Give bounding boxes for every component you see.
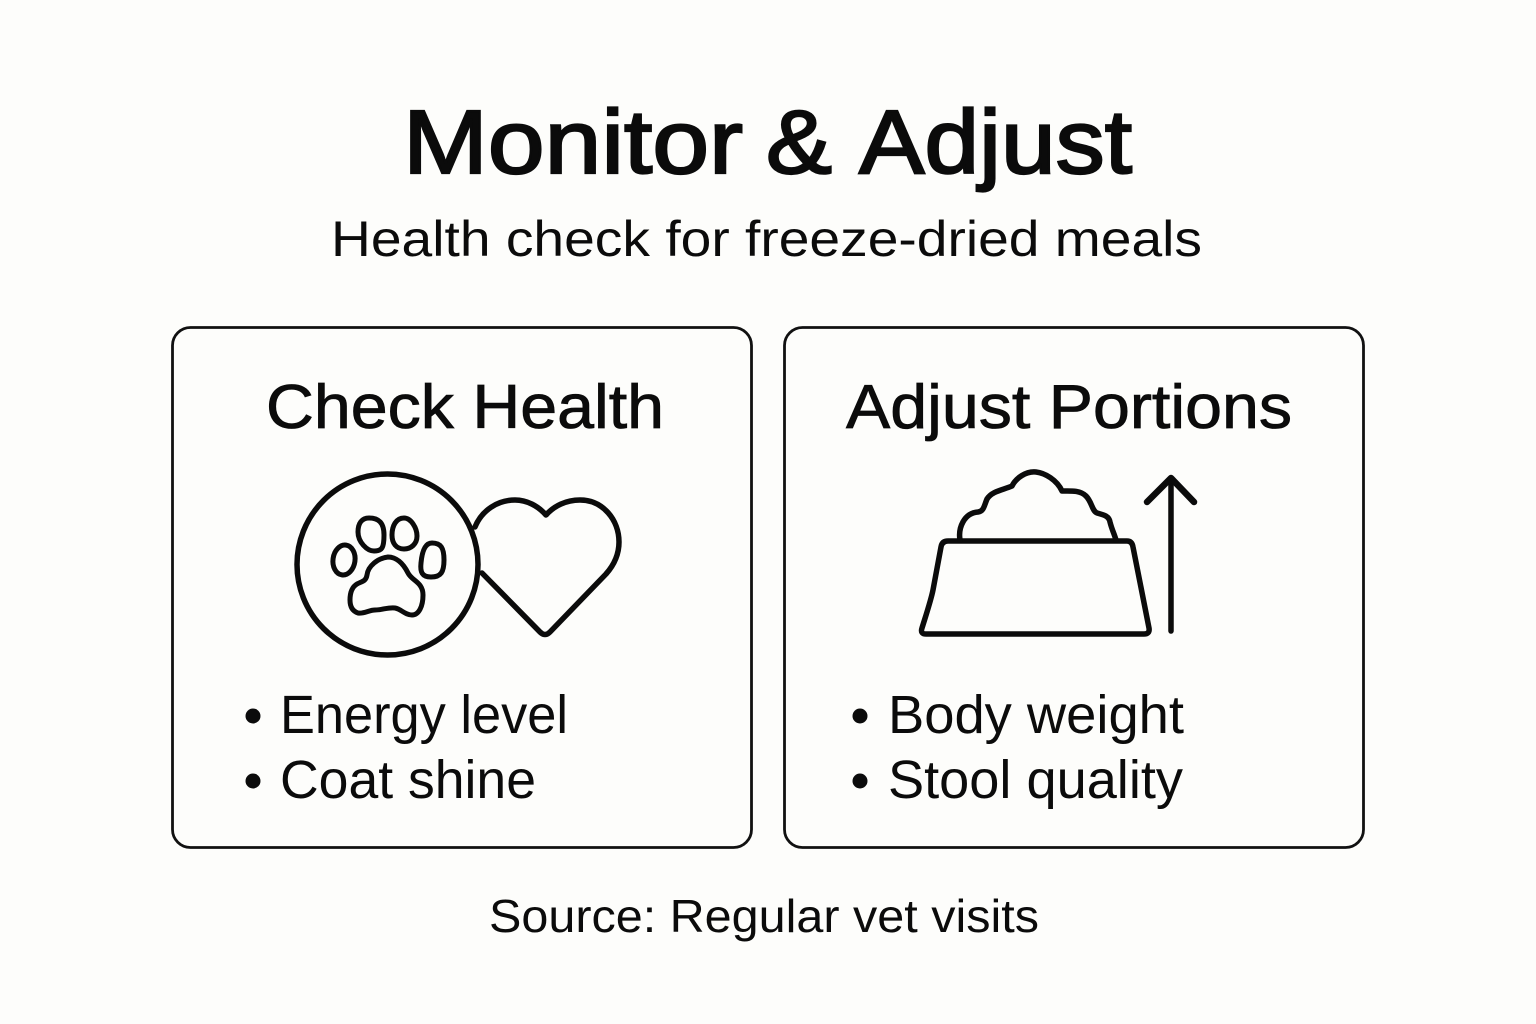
- bullet list: check health: Energy level: [280, 685, 568, 745]
- heading: adjust portions: Adjust Portions: [846, 373, 1292, 442]
- icon: heart: [475, 500, 619, 634]
- icon: food pile: [960, 472, 1116, 540]
- icon: paw in circle with heart: [297, 474, 619, 655]
- title: &: [766, 93, 832, 193]
- bullet list: adjust portions: Body weight: [888, 685, 1184, 745]
- icon: food bowl with up arrow: [922, 472, 1194, 634]
- bullet list: check health: [246, 685, 568, 810]
- title: Monitor: [403, 93, 743, 193]
- source note: Source: Regular vet visits: [489, 890, 1039, 942]
- panel: check health: [172, 328, 752, 848]
- heading: check health: Check Health: [266, 373, 664, 442]
- icon: paw: [331, 518, 444, 615]
- title: [403, 93, 1132, 193]
- icon: circle: [297, 474, 478, 655]
- icon: up arrow: [1168, 478, 1174, 631]
- title: Adjust: [859, 93, 1132, 193]
- bullet list: adjust portions: Stool quality: [888, 750, 1183, 810]
- bullet list: check health: Coat shine: [280, 750, 536, 810]
- icon: bowl: [922, 541, 1149, 634]
- bullet list: adjust portions: [852, 685, 1184, 810]
- panel: adjust portions: [784, 328, 1364, 848]
- subtitle: Health check for freeze-dried meals: [331, 211, 1202, 267]
